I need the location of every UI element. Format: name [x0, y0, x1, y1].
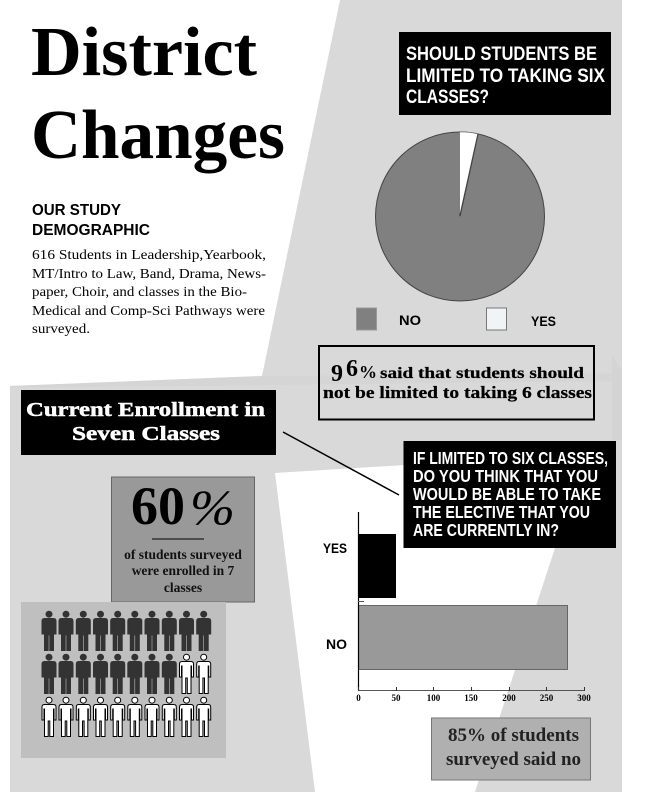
stat: 60%: of students surveyed — [124, 547, 242, 562]
pie legend: NO — [399, 312, 421, 328]
connector line — [283, 432, 399, 495]
body text: surveyed. — [32, 321, 90, 336]
bar: yes — [358, 534, 396, 598]
body text: Medical and Comp-Sci Pathways were — [32, 303, 265, 318]
category labels — [323, 540, 347, 652]
axis labels: 250 — [540, 693, 554, 703]
pie chart — [376, 132, 544, 301]
title: District — [31, 14, 257, 91]
stat: 60% — [112, 476, 254, 602]
callout: 96%: said that students should — [380, 365, 584, 382]
pie legend — [356, 308, 556, 330]
heading: our study demographic: OUR STUDY — [32, 202, 121, 219]
axis labels: 100 — [427, 693, 441, 703]
callout: 96%: 6 — [346, 356, 358, 382]
category labels: NO — [326, 636, 347, 652]
stat: 60%: were enrolled in 7 — [132, 563, 235, 578]
axis labels: 150 — [464, 693, 478, 703]
stat: 60%: 60 — [131, 476, 185, 536]
heading: current enrollment — [21, 390, 276, 455]
axis labels: 0 — [356, 693, 361, 703]
body text: paper, Choir, and classes in the Bio- — [32, 284, 248, 299]
axis labels — [356, 693, 591, 703]
study demographic text block — [32, 202, 267, 336]
callout: 96% — [319, 346, 594, 420]
axis labels: 300 — [577, 693, 591, 703]
body text: 616 Students in Leadership,Yearbook, — [32, 247, 266, 262]
not enrolled figures — [42, 654, 211, 736]
axis labels: 200 — [502, 693, 516, 703]
question: elective: WOULD BE ABLE TO TAKE — [413, 484, 601, 504]
stat: 60%: % — [190, 479, 235, 535]
heading: current enrollment: Current Enrollment in — [26, 399, 266, 421]
body text: MT/Intro to Law, Band, Drama, News- — [32, 266, 267, 281]
question: six classes: SHOULD STUDENTS BE — [406, 43, 597, 65]
body text — [32, 247, 267, 336]
enrolled figures — [42, 611, 211, 694]
callout: 85%: surveyed said no — [446, 749, 581, 770]
title — [31, 14, 285, 174]
question: elective: THE ELECTIVE THAT YOU — [413, 502, 590, 522]
heading: our study demographic: DEMOGRAPHIC — [32, 222, 150, 239]
question: elective: IF LIMITED TO SIX CLASSES, — [413, 448, 608, 468]
bar chart — [323, 512, 591, 703]
pie legend: YES — [531, 313, 556, 329]
bar: no — [358, 606, 568, 670]
category labels: YES — [323, 540, 347, 556]
question: six classes: CLASSES? — [406, 86, 489, 108]
question: elective: DO YOU THINK THAT YOU — [413, 466, 598, 486]
question: six classes — [399, 32, 611, 115]
question: six classes: LIMITED TO TAKING SIX — [406, 65, 605, 87]
heading: our study demographic — [32, 202, 150, 239]
callout: 96%: % — [359, 362, 377, 382]
question: elective — [404, 441, 616, 548]
people icon chart — [21, 602, 226, 758]
question: elective: ARE CURRENTLY IN? — [413, 520, 559, 540]
heading: current enrollment: Seven Classes — [72, 423, 220, 445]
callout: 85%: 85% of students — [448, 725, 579, 746]
axis labels: 50 — [392, 693, 401, 703]
callout: 96%: 9 — [331, 361, 343, 387]
callout: 96%: not be limited to taking 6 classes — [323, 383, 593, 402]
stat: 60%: classes — [164, 580, 202, 595]
title: Changes — [31, 97, 285, 174]
callout: 85% — [432, 718, 590, 780]
